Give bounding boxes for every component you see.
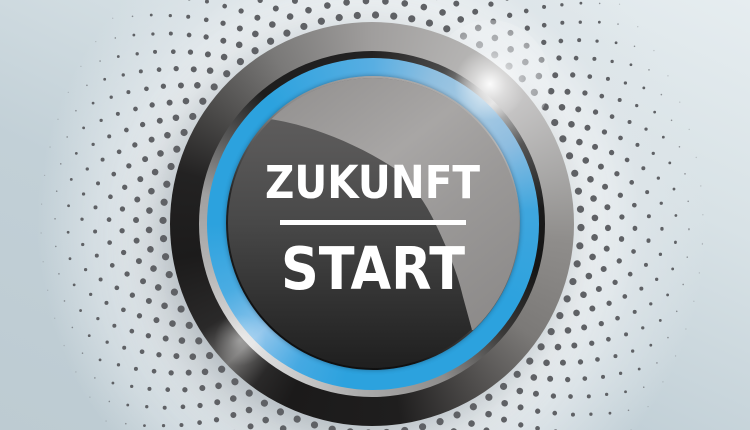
gloss reflection <box>272 78 519 330</box>
highlight bottom left <box>214 314 266 366</box>
inner chrome ring <box>199 51 545 397</box>
inner dark disc <box>228 78 518 368</box>
silver rim of inner disc <box>226 76 520 370</box>
glare over dots near the top right of the button <box>430 20 550 140</box>
label START: START <box>281 234 465 303</box>
button <box>170 22 574 426</box>
soft shadow behind the button <box>172 24 572 424</box>
disc gloss and label <box>218 54 521 362</box>
highlight top right <box>454 48 526 120</box>
label ZUKUNFT: ZUKUNFT <box>265 156 480 209</box>
blue light ring <box>207 58 539 390</box>
outer metal ring <box>170 22 574 426</box>
divider line <box>280 220 466 225</box>
